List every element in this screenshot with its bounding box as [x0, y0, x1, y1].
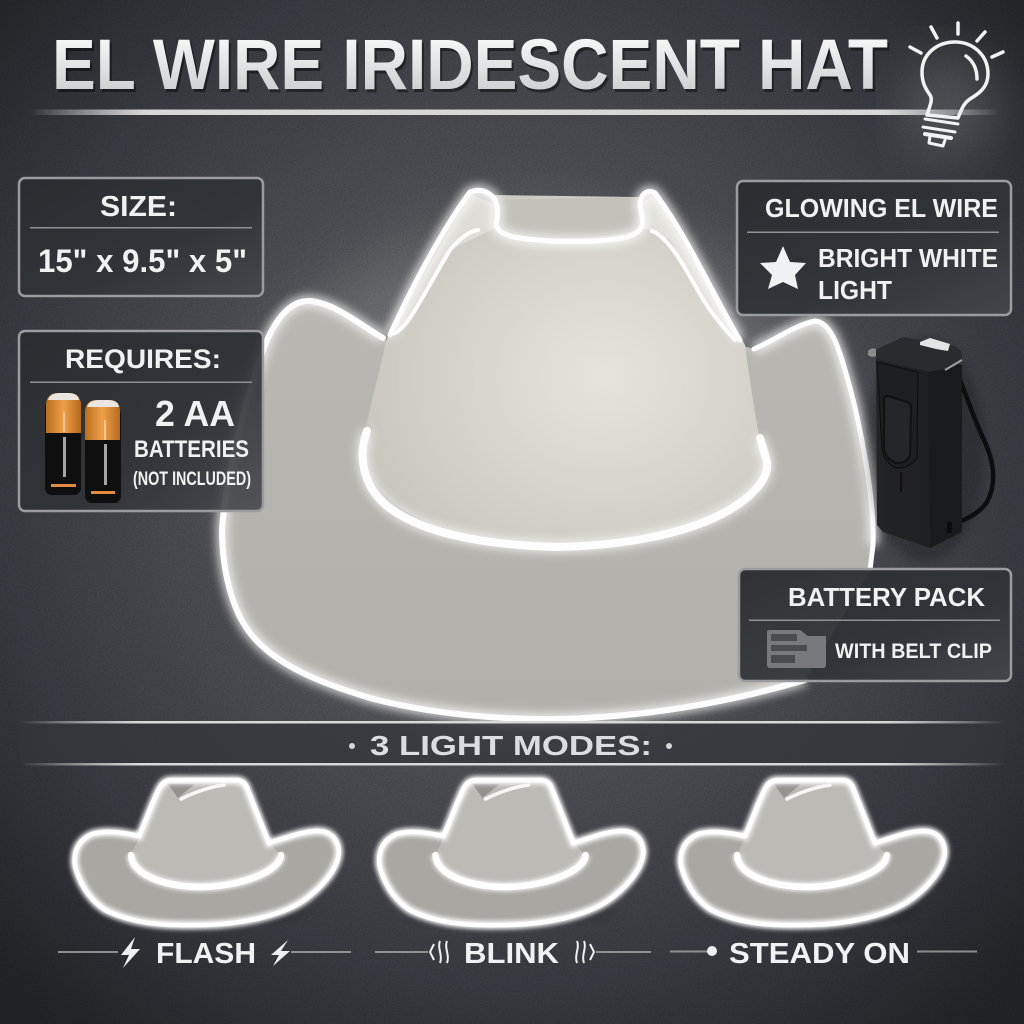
hat crown [362, 190, 765, 547]
bright white light text [818, 243, 998, 305]
main hat [222, 190, 873, 720]
panel: battery pack [739, 569, 1011, 681]
with belt clip text: WITH BELT CLIP [835, 640, 992, 663]
panel: glowing el wire [737, 181, 1011, 315]
mode label: blink [375, 938, 651, 970]
mode label: blink: BLINK [464, 938, 559, 970]
battery count: 2 AA [155, 393, 235, 434]
icon: light bulb [904, 23, 1003, 155]
heading: battery pack: BATTERY PACK [788, 582, 985, 612]
title: EL WIRE IRIDESCENT HAT [52, 26, 888, 105]
icon: batteries [45, 393, 121, 503]
batteries label: BATTERIES [134, 436, 249, 463]
heading: glowing el wire: GLOWING EL WIRE [765, 193, 998, 223]
mode label: flash [58, 937, 351, 970]
flash mode hat [75, 780, 339, 925]
bright white light text: BRIGHT WHITE [818, 243, 998, 273]
icon: belt clip [767, 630, 826, 668]
hat brim [222, 301, 871, 719]
steady on mode hat [681, 780, 945, 925]
mode label: flash: FLASH [156, 938, 256, 970]
heading: light modes: 3 LIGHT MODES: [370, 730, 652, 761]
panel: size [19, 178, 263, 296]
title: EL WIRE IRIDESCENT HAT [54, 29, 890, 108]
not included note: (NOT INCLUDED) [133, 469, 251, 490]
blink mode hat [379, 780, 644, 925]
bright white light text: LIGHT [818, 275, 892, 305]
brim wire [222, 190, 873, 719]
battery pack image [865, 337, 993, 562]
mode label: steady on [670, 938, 977, 970]
light modes banner [20, 721, 1004, 766]
cable [955, 368, 993, 522]
wire glow [222, 190, 873, 719]
icon: star [760, 246, 806, 289]
panel: requires [19, 331, 263, 511]
size value: 15" x 9.5" x 5" [38, 243, 247, 279]
heading: size: SIZE: [100, 191, 177, 223]
mode label: steady on: STEADY ON [729, 938, 910, 970]
heading: requires: REQUIRES: [65, 344, 221, 374]
